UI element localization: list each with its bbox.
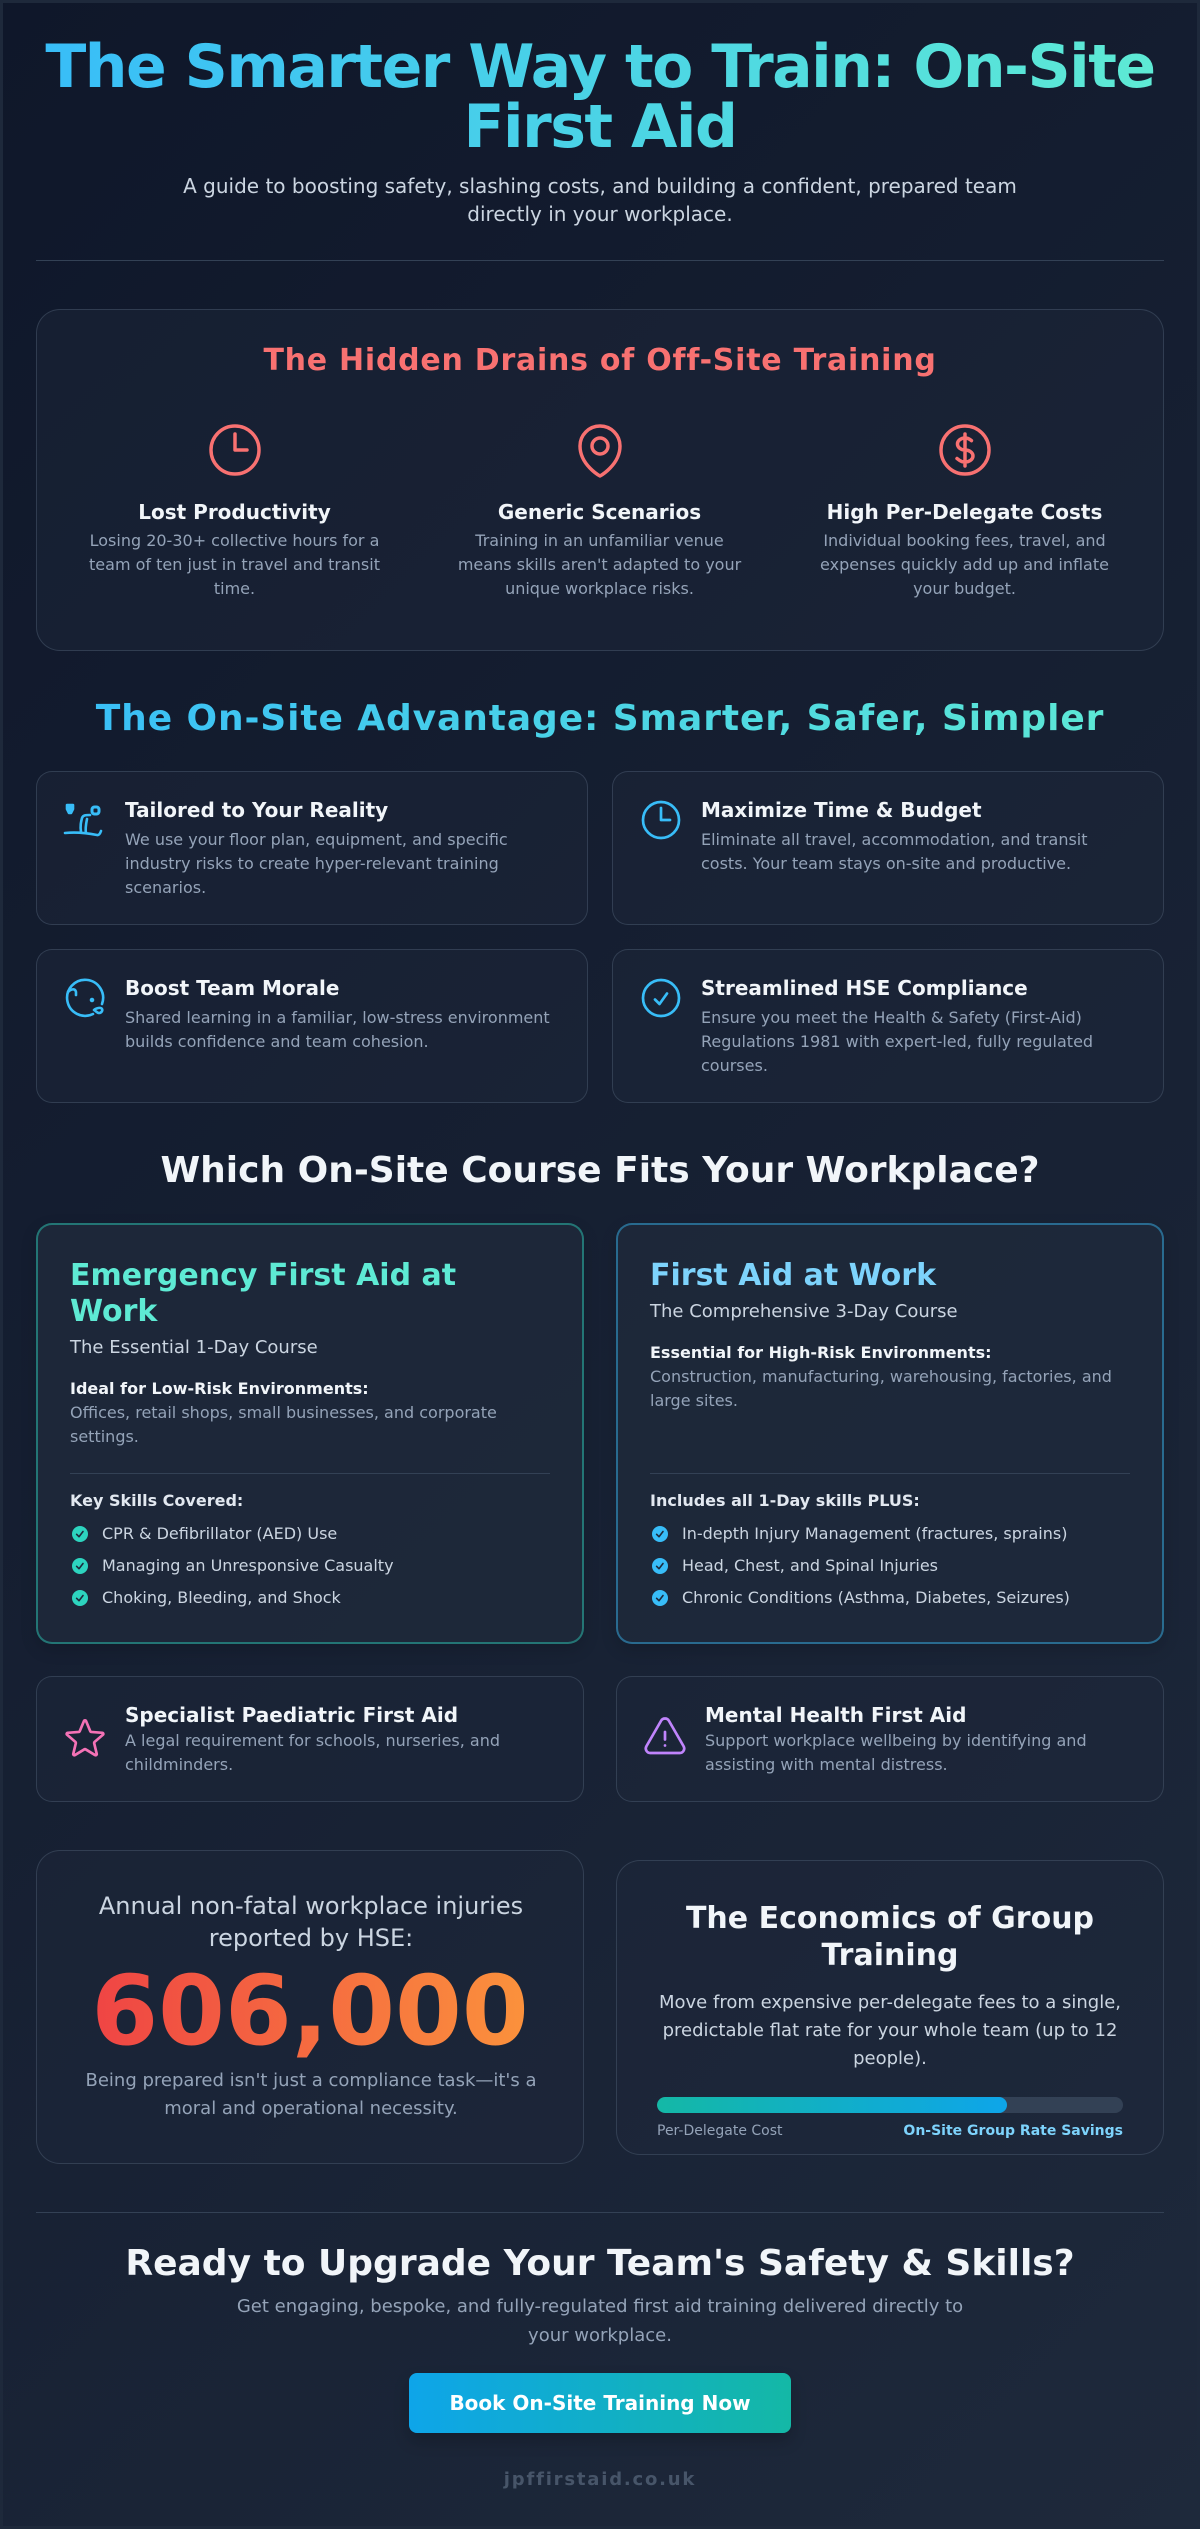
savings bar: [657, 2097, 1123, 2113]
item title: Lost Productivity: [138, 500, 331, 524]
item text: Losing 20-30+ collective hours for a team of ten just in travel and transit time.: [89, 531, 380, 598]
card title: Boost Team Morale: [125, 976, 339, 1000]
button: Book On-Site Training Now: [449, 2391, 751, 2415]
card: mental health first aid: [616, 1676, 1164, 1802]
course title: Emergency First Aid at Work: [70, 1258, 456, 1329]
card: specialist paediatric first aid: [36, 1676, 584, 1802]
icon: face: [66, 978, 104, 1018]
course title: First Aid at Work: [650, 1258, 936, 1293]
skill: Choking, Bleeding, and Shock: [102, 1588, 341, 1607]
audience: Construction, manufacturing, warehousing, factories, and large sites.: [650, 1367, 1112, 1410]
skill: Managing an Unresponsive Casualty: [102, 1556, 394, 1575]
column: generic scenarios: [458, 424, 742, 598]
stat panel: annual injuries: [36, 1850, 584, 2164]
icon: dollar: [939, 424, 991, 476]
icon: check circle: [642, 978, 680, 1018]
icon: warning triangle: [644, 1717, 686, 1754]
course card: emergency first aid at work: [36, 1223, 584, 1644]
card: tailored to your reality: [36, 771, 588, 925]
skills list: [72, 1524, 394, 1607]
skills list: [652, 1524, 1070, 1607]
subtitle: A guide to boosting safety, slashing costs, and building a confident, prepared team directly in your workplace.: [183, 174, 1017, 226]
item title: High Per-Delegate Costs: [827, 500, 1102, 524]
card: boost team morale: [36, 949, 588, 1103]
card text: Shared learning in a familiar, low-stress environment builds confidence and team cohesion.: [125, 1008, 550, 1051]
column: high per-delegate costs: [820, 424, 1109, 598]
card text: Eliminate all travel, accommodation, and transit costs. Your team stays on-site and productive.: [701, 830, 1088, 873]
heading: which course: Which On-Site Course Fits Your Workplace?: [160, 1150, 1040, 1191]
cta heading: Ready to Upgrade Your Team's Safety & Skills?: [125, 2243, 1075, 2284]
panel text: Move from expensive per-delegate fees to a single, predictable flat rate for your whole team (up to 12 people).: [659, 1992, 1121, 2069]
skills heading: Key Skills Covered:: [70, 1491, 243, 1510]
card text: We use your floor plan, equipment, and specific industry risks to create hyper-relevant training scenarios.: [125, 830, 508, 897]
card title: Maximize Time & Budget: [701, 798, 982, 822]
title: The Smarter Way to Train: On-Site First Aid: [45, 32, 1155, 162]
skill: Head, Chest, and Spinal Injuries: [682, 1556, 938, 1575]
card title: Mental Health First Aid: [705, 1703, 966, 1727]
stat number: 606,000: [91, 1955, 529, 2067]
icon: clock: [642, 800, 680, 840]
item text: Training in an unfamiliar venue means skills aren't adapted to your unique workplace risks.: [458, 531, 741, 598]
audience: Offices, retail shops, small businesses, and corporate settings.: [70, 1403, 497, 1446]
button: [409, 2373, 791, 2433]
card: streamlined HSE compliance: [612, 949, 1164, 1103]
course subtitle: The Essential 1-Day Course: [70, 1337, 318, 1358]
audience: [70, 1379, 497, 1446]
skill: CPR & Defibrillator (AED) Use: [102, 1524, 337, 1543]
panel heading: The Economics of Group Training: [686, 1901, 1094, 1973]
skills heading: Includes all 1-Day skills PLUS:: [650, 1491, 920, 1510]
heading: on-site advantage: The On-Site Advantage: Smarter, Safer, Simpler: [96, 698, 1104, 739]
heading: hidden drains: The Hidden Drains of Off-Site Training: [263, 343, 937, 378]
card: maximize time and budget: [612, 771, 1164, 925]
course subtitle: The Comprehensive 3-Day Course: [650, 1301, 958, 1322]
bar label right: On-Site Group Rate Savings: [903, 2123, 1123, 2139]
item title: Generic Scenarios: [498, 500, 701, 524]
audience: Essential for High-Risk Environments:: [650, 1343, 992, 1362]
skill: In-depth Injury Management (fractures, sprains): [682, 1524, 1067, 1543]
call to action: [125, 2243, 1075, 2490]
skill: Chronic Conditions (Asthma, Diabetes, Seizures): [682, 1588, 1070, 1607]
stat text: Being prepared isn't just a compliance task—it's a moral and operational necessity.: [85, 2070, 537, 2119]
card title: Tailored to Your Reality: [125, 798, 388, 822]
icon: map pin: [578, 424, 622, 478]
icon: tools: [64, 804, 102, 836]
bar label left: Per-Delegate Cost: [657, 2123, 783, 2139]
icon: star: [65, 1719, 105, 1757]
header: [36, 32, 1164, 261]
item text: Individual booking fees, travel, and expenses quickly add up and inflate your budget.: [820, 531, 1109, 598]
card title: Streamlined HSE Compliance: [701, 976, 1028, 1000]
card title: Specialist Paediatric First Aid: [125, 1703, 458, 1727]
card text: Support workplace wellbeing by identifying and assisting with mental distress.: [705, 1731, 1087, 1774]
cta text: Get engaging, bespoke, and fully-regulated first aid training delivered directly to your workplace.: [237, 2296, 963, 2346]
footer url: jpffirstaid.co.uk: [504, 2469, 696, 2490]
audience: Ideal for Low-Risk Environments:: [70, 1379, 369, 1398]
audience: [650, 1343, 1112, 1410]
stat label: Annual non-fatal workplace injuries reported by HSE:: [99, 1892, 523, 1952]
column: lost productivity: [89, 424, 380, 598]
panel: hidden drains of off-site training: [36, 309, 1164, 651]
card text: Ensure you meet the Health & Safety (First-Aid) Regulations 1981 with expert-led, fully regulated courses.: [701, 1008, 1093, 1075]
course card: first aid at work: [616, 1223, 1164, 1644]
panel: economics of group training: [616, 1860, 1164, 2155]
icon: clock: [209, 424, 261, 476]
card text: A legal requirement for schools, nurseries, and childminders.: [125, 1731, 500, 1774]
